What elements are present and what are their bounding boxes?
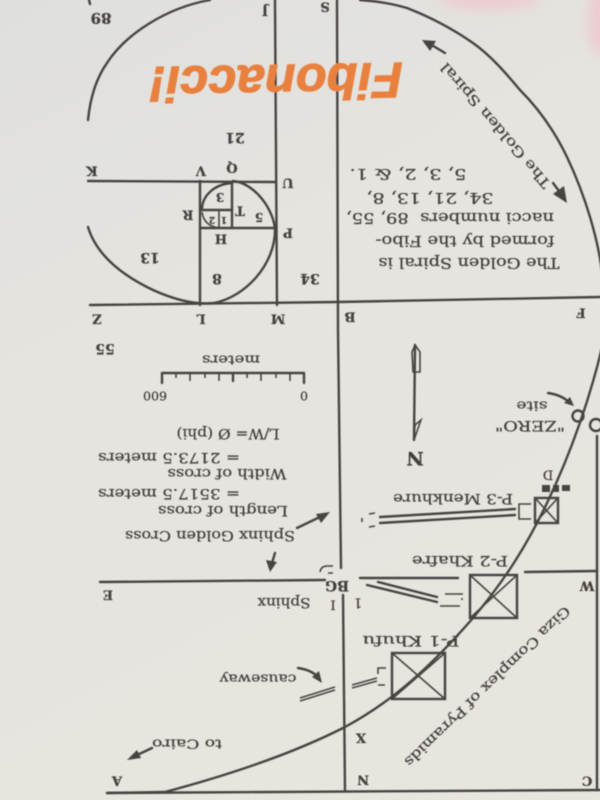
pyramid P-1 Khufu: P-1 Khufu bbox=[362, 632, 460, 648]
text block: golden spiral description bbox=[346, 165, 560, 270]
arrows: Sphinx Golden Cross bbox=[266, 512, 330, 572]
grid labels: spiral squares: J bbox=[262, 2, 269, 18]
text block: golden spiral description: 34, 21, 13, 8, bbox=[366, 189, 494, 205]
corner labels: lower map: N bbox=[357, 772, 369, 786]
grid labels: spiral squares: P bbox=[283, 224, 293, 240]
text block: Sphinx Golden Cross: Width of cross bbox=[168, 465, 286, 481]
pyramid P-2 Khafre bbox=[367, 552, 517, 618]
Sphinx: BG bbox=[325, 577, 349, 593]
grid labels: spiral squares: L bbox=[196, 310, 206, 326]
grid labels: spiral squares: 34 bbox=[300, 270, 320, 286]
grid labels: spiral squares: 3 bbox=[216, 190, 224, 204]
grid labels: spiral squares: R bbox=[182, 206, 193, 222]
north arrow bbox=[406, 345, 424, 469]
grid labels: spiral squares: 8 bbox=[212, 270, 222, 286]
grid labels: spiral squares: 2 bbox=[209, 214, 215, 224]
corner labels: lower map: C bbox=[582, 772, 592, 788]
grid labels: spiral squares: B bbox=[344, 308, 356, 324]
pink stain at top right bbox=[440, 0, 600, 56]
Sphinx: I bbox=[330, 596, 336, 612]
grid labels: spiral squares: 1 bbox=[221, 214, 227, 224]
grid labels: spiral squares: H bbox=[215, 230, 227, 246]
grid labels: spiral squares: 55 bbox=[95, 340, 115, 356]
grid labels: spiral squares: Z bbox=[92, 310, 102, 326]
text block: Sphinx Golden Cross: = 3517.5 meters bbox=[98, 485, 240, 501]
title: Fibonacci!: Fibonacci! bbox=[149, 52, 403, 112]
pyramid P-3 Menkhure: D bbox=[543, 466, 553, 482]
grid labels: spiral squares: Q bbox=[226, 160, 238, 174]
text block: Sphinx Golden Cross: Sphinx Golden Cross bbox=[125, 527, 295, 543]
scale bar bbox=[143, 352, 308, 404]
Sphinx: Sphinx bbox=[257, 594, 310, 610]
text block: golden spiral description: nacci numbers 89, 55, bbox=[346, 209, 554, 225]
pyramid P-1 Khufu bbox=[300, 632, 460, 701]
causeway label and arrow: causeway bbox=[219, 670, 296, 686]
text block: golden spiral description: formed by the Fibo- bbox=[375, 232, 554, 248]
text block: Sphinx Golden Cross: L/W= Ø (phi) bbox=[176, 425, 280, 441]
grid labels: spiral squares bbox=[86, 0, 586, 356]
ZERO site marker: "ZERO" bbox=[495, 417, 565, 433]
corner labels: lower map: A bbox=[111, 772, 123, 788]
Sphinx bbox=[257, 566, 362, 612]
curved label: The Golden Spiral: The Golden Spiral bbox=[440, 62, 550, 190]
corner labels: lower map bbox=[103, 578, 595, 788]
ZERO site marker bbox=[495, 393, 600, 433]
causeway label and arrow bbox=[219, 668, 322, 686]
rotated label: Giza Complex of Pyramids: Giza Complex of Pyramids bbox=[401, 602, 573, 770]
grid labels: spiral squares: 89 bbox=[91, 9, 111, 27]
scale bar: meters bbox=[202, 352, 260, 366]
scale bar: 600 bbox=[143, 388, 167, 404]
grid labels: spiral squares: U bbox=[282, 174, 294, 190]
text block: Sphinx Golden Cross bbox=[98, 425, 295, 543]
corner labels: lower map: W bbox=[579, 578, 595, 592]
to Cairo label and arrow: to Cairo bbox=[152, 736, 222, 750]
grid labels: spiral squares: 5 bbox=[255, 210, 263, 224]
text block: Sphinx Golden Cross: = 2173.5 meters bbox=[98, 449, 240, 465]
grid labels: spiral squares: T bbox=[235, 202, 245, 218]
corner labels: lower map: E bbox=[103, 586, 113, 602]
to Cairo label and arrow bbox=[127, 736, 222, 760]
grid labels: spiral squares: 21 bbox=[225, 129, 245, 145]
pyramid P-2 Khafre: P-2 Khafre bbox=[412, 552, 508, 568]
pyramid P-3 Menkhure bbox=[362, 466, 570, 527]
grid labels: spiral squares: K bbox=[86, 162, 98, 178]
ZERO site marker: site bbox=[516, 398, 548, 412]
grid labels: spiral squares: 13 bbox=[140, 249, 160, 265]
text block: golden spiral description: 5, 3, 2, & 1. bbox=[350, 165, 466, 181]
north arrow: N bbox=[406, 447, 424, 469]
corner labels: lower map: X bbox=[355, 730, 366, 744]
Sphinx: 1 bbox=[354, 594, 362, 610]
scale bar: 0 bbox=[300, 388, 308, 404]
pyramid P-3 Menkhure: P-3 Menkhure bbox=[393, 490, 513, 506]
grid labels: spiral squares: F bbox=[576, 304, 586, 320]
grid labels: spiral squares: M bbox=[271, 310, 285, 326]
text block: golden spiral description: The Golden Spiral is bbox=[378, 254, 560, 270]
arrows: golden spiral span bbox=[422, 40, 567, 203]
grid labels: spiral squares: V bbox=[195, 162, 207, 178]
text block: Sphinx Golden Cross: Length of cross bbox=[158, 502, 288, 518]
